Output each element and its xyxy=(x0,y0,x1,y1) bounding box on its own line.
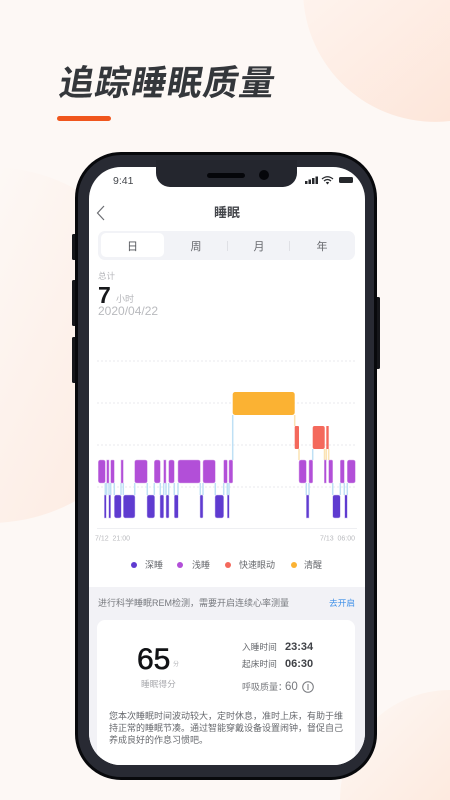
REM notice: 进行科学睡眠REM检测，需要开启连续心率测量 xyxy=(98,598,289,608)
bottom grey section xyxy=(89,587,365,765)
tab day: 日 xyxy=(127,241,138,253)
total value: 7 xyxy=(98,282,111,308)
score label: 睡眠得分 xyxy=(141,679,176,689)
axis label start: 7/12 21:00 xyxy=(95,536,130,542)
sleep advice: 您本次睡眠时间波动较大，定时休息，准时上床，有助于维 xyxy=(109,711,343,721)
tab week: 周 xyxy=(190,241,202,253)
date: 2020/04/22 xyxy=(98,304,158,318)
status time: 9:41 xyxy=(113,175,133,187)
legend deep sleep xyxy=(131,562,137,568)
legend deep sleep label: 深睡 xyxy=(145,560,163,570)
title: 追踪睡眠质量 xyxy=(56,64,279,103)
back arrow xyxy=(96,206,104,220)
legend light sleep xyxy=(177,562,183,568)
title accent bar xyxy=(57,116,111,121)
legend light sleep label: 浅睡 xyxy=(192,560,210,570)
info icon xyxy=(302,681,314,693)
legend xyxy=(131,560,322,570)
notch camera xyxy=(259,170,269,180)
bedtime value: 23:34 xyxy=(285,641,313,653)
legend awake xyxy=(291,562,297,568)
phone screen xyxy=(89,167,365,765)
REM bars xyxy=(295,426,329,449)
deep sleep bars xyxy=(104,495,347,518)
legend REM xyxy=(225,562,231,568)
phone body xyxy=(75,152,377,780)
sleep chart xyxy=(95,360,357,542)
screen heading: 睡眠 xyxy=(214,205,240,220)
wake label: 起床时间 xyxy=(242,659,277,669)
legend REM label: 快速眼动 xyxy=(239,560,275,570)
total label: 总计 xyxy=(98,271,115,281)
status icons xyxy=(305,176,353,184)
notch speaker xyxy=(207,173,245,178)
score card xyxy=(97,620,355,765)
sleep advice: 持正常的睡眠节凑。通过智能穿戴设备设置闹钟，督促自己 xyxy=(109,723,343,733)
total unit: 小时 xyxy=(116,294,134,304)
bedtime label: 入睡时间 xyxy=(242,642,277,652)
enable link: 去开启 xyxy=(329,598,355,608)
legend awake label: 清醒 xyxy=(304,560,322,570)
score unit: 分 xyxy=(173,662,179,668)
wake value: 06:30 xyxy=(285,658,313,670)
breathing quality value: 60 xyxy=(285,681,298,693)
awake bar xyxy=(233,392,295,415)
sleep advice xyxy=(109,711,343,745)
light sleep bars xyxy=(98,460,355,483)
notch xyxy=(156,160,297,187)
active tab xyxy=(101,233,164,257)
tab year: 年 xyxy=(316,241,328,253)
score value: 65 xyxy=(137,643,170,676)
transition lines xyxy=(105,415,347,495)
breathing quality label: 呼吸质量： xyxy=(242,682,287,692)
phone side buttons xyxy=(72,234,380,383)
sleep advice: 养成良好的作息习惯吧。 xyxy=(109,735,208,745)
segmented tabs xyxy=(98,231,355,260)
axis label end: 7/13 06:00 xyxy=(320,536,355,542)
tab month: 月 xyxy=(254,241,264,253)
